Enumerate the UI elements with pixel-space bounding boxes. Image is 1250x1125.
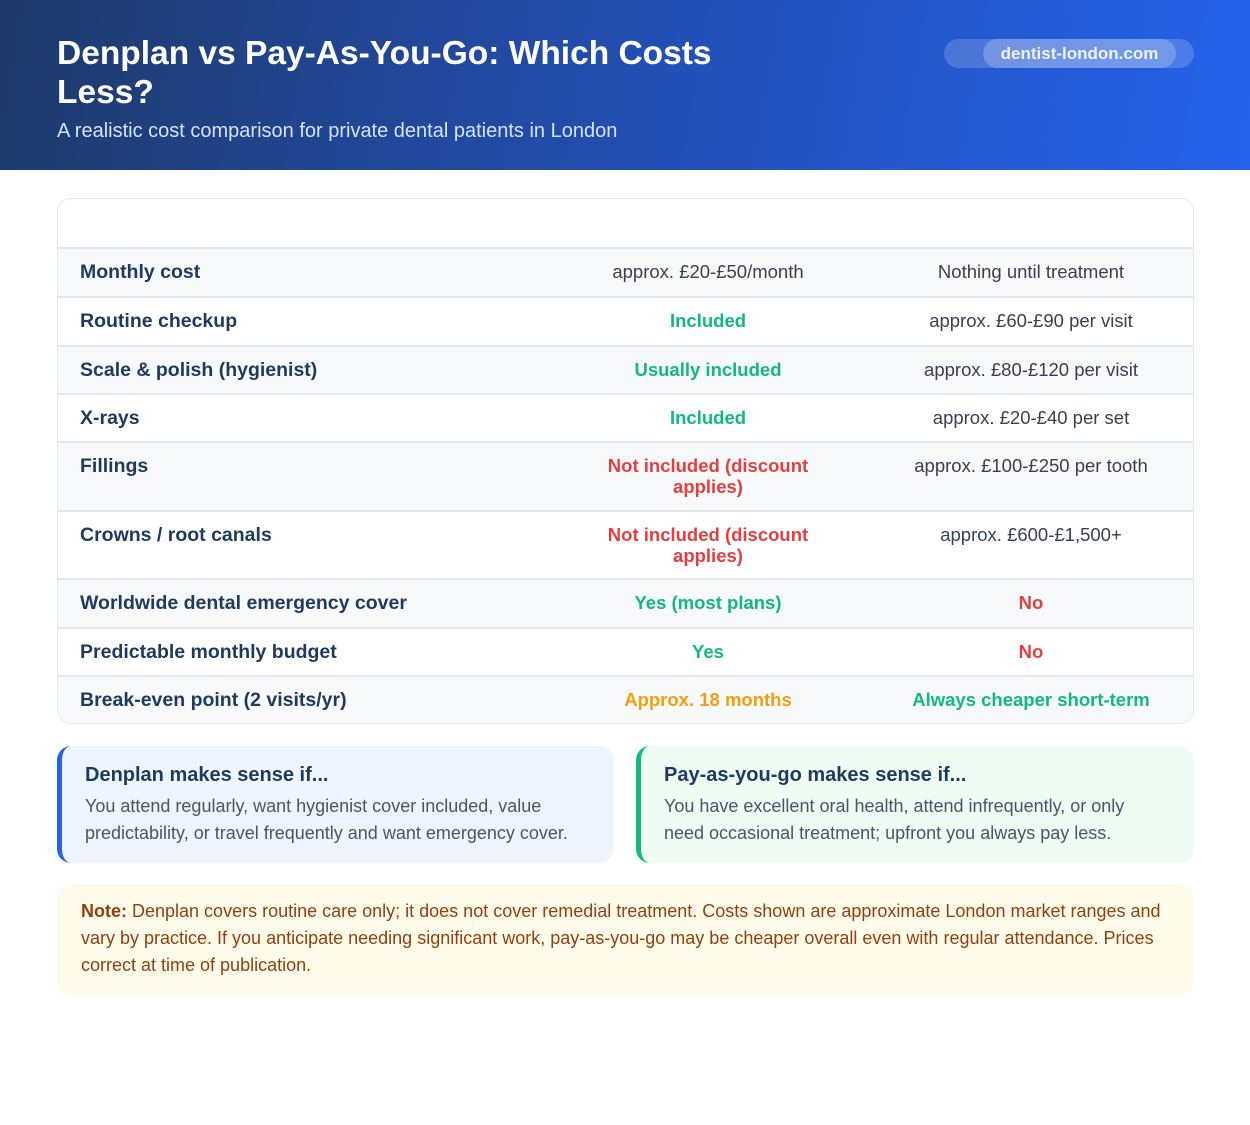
row: break-even — [58, 675, 1195, 725]
row: budget: Predictable monthly budget — [80, 641, 337, 663]
row: break-even: Approx. 18 months — [624, 689, 792, 710]
title: Denplan vs Pay-As-You-Go: Which Costs Less? — [57, 35, 712, 111]
header banner — [0, 0, 1250, 170]
row: scale & polish: Scale & polish (hygienist) — [80, 359, 317, 381]
callout: Denplan: Denplan makes sense if... — [85, 764, 328, 786]
note box — [57, 884, 1194, 995]
row: routine checkup: approx. £60-£90 per visit — [929, 310, 1133, 331]
row: budget — [58, 627, 1195, 675]
row: scale & polish: approx. £80-£120 per visit — [924, 359, 1138, 380]
row: crowns: applies) — [673, 545, 743, 566]
row: crowns: Not included (discount — [608, 524, 808, 545]
row: x-rays: X-rays — [80, 407, 140, 429]
row: monthly cost: Nothing until treatment — [938, 261, 1124, 282]
row: fillings: applies) — [673, 476, 743, 497]
note box: Note: Denplan covers routine care only; it does not cover remedial treatment. Costs shown are approximate London market ranges and vary by practice. If you anticipate needing significant work, pay-as-you-go may be cheaper overall even with regular attendance. Prices correct at time of publication. — [81, 901, 1161, 975]
row: fillings: approx. £100-£250 per tooth — [914, 455, 1148, 476]
callout: Denplan — [57, 746, 614, 863]
callout: Denplan: You attend regularly, want hygienist cover included, value predictability, or travel frequently and want emergency cover. — [85, 796, 568, 843]
row: fillings: Fillings — [80, 455, 148, 477]
row: fillings — [58, 441, 1195, 510]
row: emergency cover: Yes (most plans) — [634, 592, 782, 613]
row: routine checkup: Included — [670, 310, 746, 331]
row: scale & polish: Usually included — [634, 359, 782, 380]
row: x-rays: approx. £20-£40 per set — [933, 407, 1129, 428]
row: routine checkup: Routine checkup — [80, 310, 237, 332]
row: emergency cover: Worldwide dental emergency cover — [80, 592, 407, 614]
row: x-rays — [58, 393, 1195, 441]
row: monthly cost: Monthly cost — [80, 261, 200, 283]
row: fillings: Not included (discount — [608, 455, 808, 476]
row: monthly cost — [58, 247, 1195, 296]
subtitle: A realistic cost comparison for private dental patients in London — [57, 120, 617, 142]
row: emergency cover — [58, 578, 1195, 627]
callout: pay-as-you-go: You have excellent oral health, attend infrequently, or only need occasional treatment; upfront you always pay less. — [664, 796, 1124, 843]
row: crowns: Crowns / root canals — [80, 524, 272, 546]
row: scale & polish — [58, 345, 1195, 393]
row: crowns — [58, 510, 1195, 578]
callout: pay-as-you-go — [636, 746, 1194, 863]
site badge: dentist-london.com — [1001, 44, 1158, 63]
row: routine checkup — [58, 296, 1195, 345]
row: monthly cost: approx. £20-£50/month — [612, 261, 804, 282]
row: budget: Yes — [692, 641, 724, 662]
row: x-rays: Included — [670, 407, 746, 428]
row: crowns: approx. £600-£1,500+ — [940, 524, 1122, 545]
row: emergency cover: No — [1019, 592, 1043, 613]
site badge — [944, 39, 1194, 68]
row: break-even: Break-even point (2 visits/yr) — [80, 689, 347, 711]
row: budget: No — [1019, 641, 1043, 662]
callout: pay-as-you-go: Pay-as-you-go makes sense if... — [664, 764, 966, 786]
row: break-even: Always cheaper short-term — [912, 689, 1150, 710]
comparison table — [57, 198, 1194, 724]
